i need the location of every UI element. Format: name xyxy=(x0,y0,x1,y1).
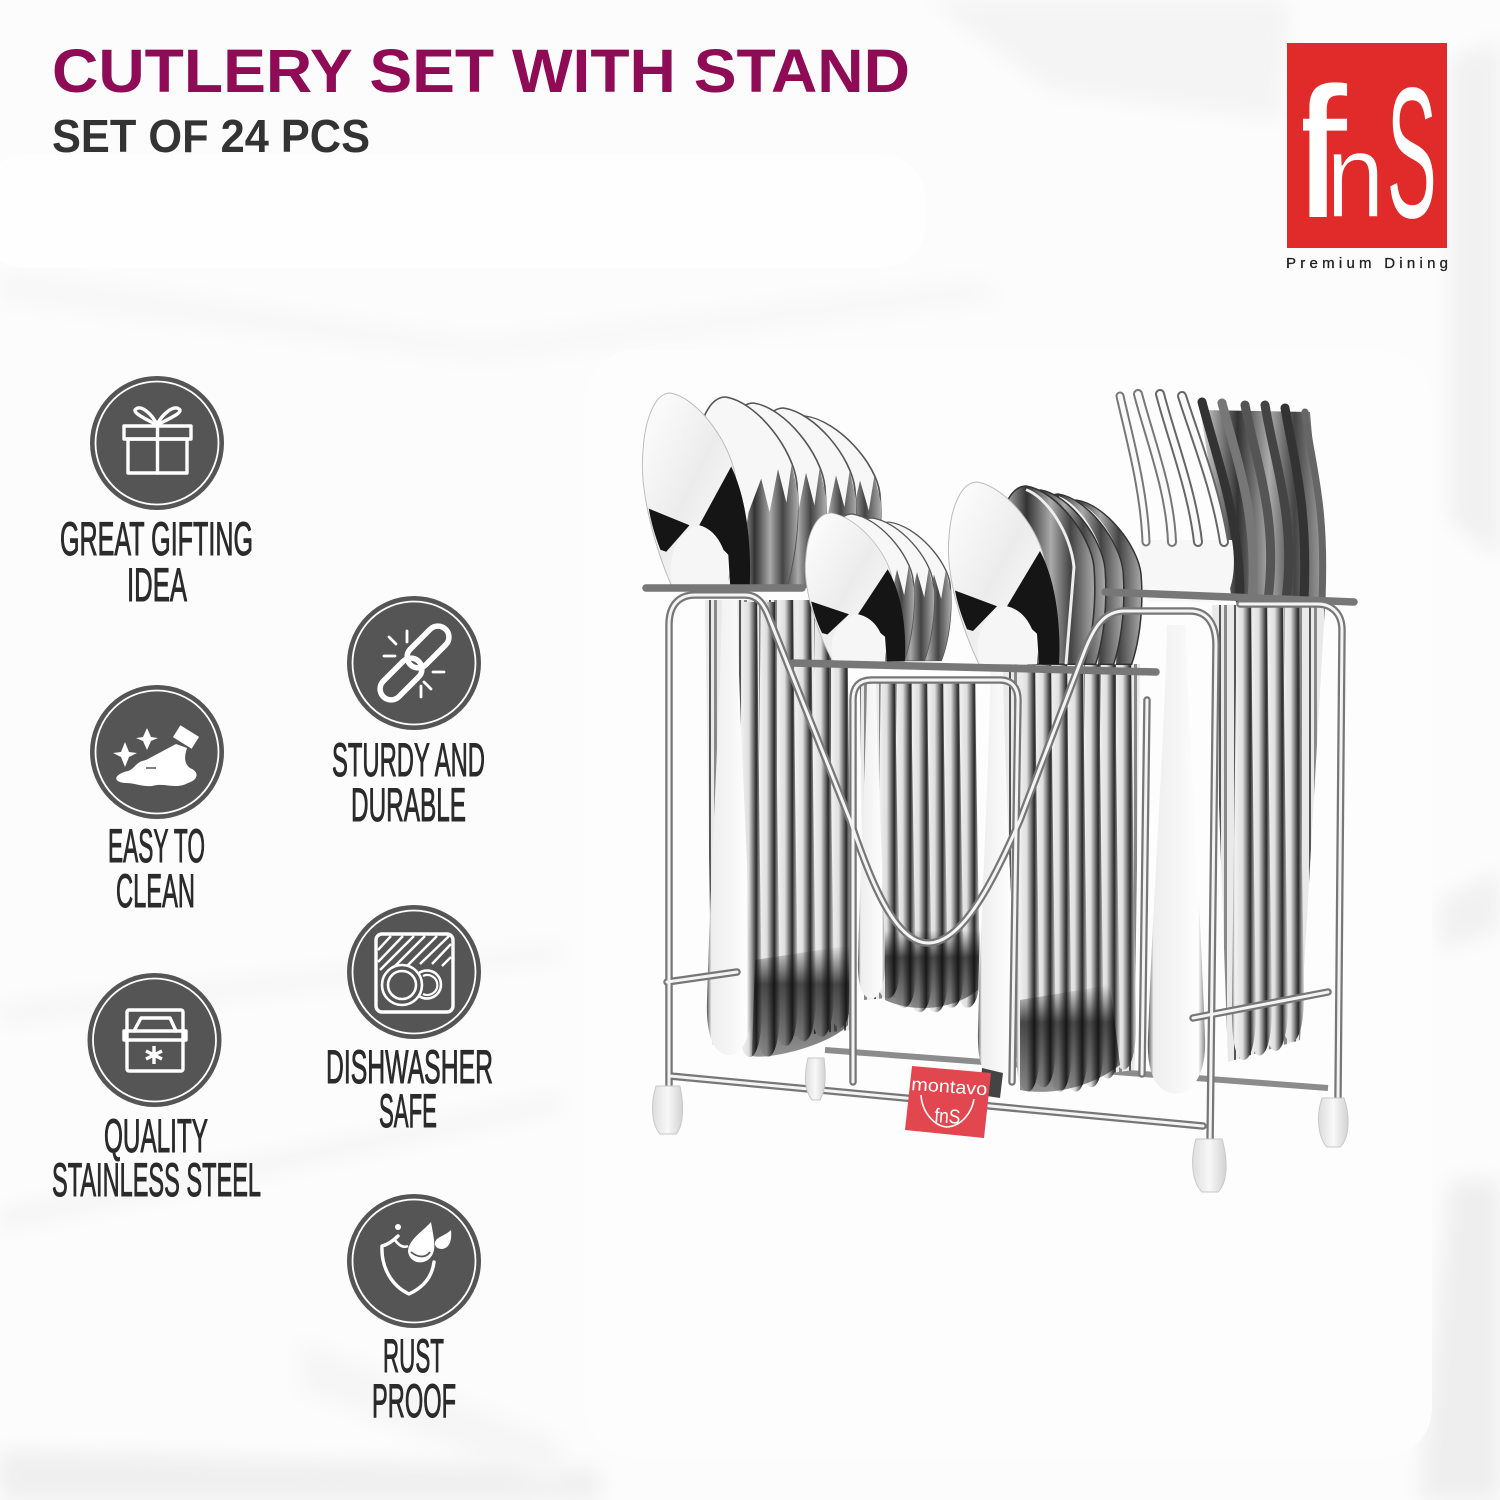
logo wordmark: S xyxy=(1387,50,1437,258)
brand tag: fnS xyxy=(934,1105,961,1129)
large spoon bowls xyxy=(642,393,881,587)
fork handles xyxy=(1148,605,1325,1094)
large spoon handles xyxy=(705,600,852,1057)
product backdrop panel xyxy=(585,350,1432,1458)
label: STAINLESS STEEL xyxy=(52,1153,261,1206)
feature: easy to clean: EASY TO xyxy=(108,819,205,872)
medium spoon bowls xyxy=(948,482,1142,664)
logo xyxy=(1286,43,1448,272)
label: RUST xyxy=(383,1329,444,1382)
brand tag: montavo xyxy=(911,1074,988,1099)
feature: easy to clean xyxy=(90,685,224,917)
small spoon handles xyxy=(858,680,980,1012)
icon: cooler box xyxy=(88,973,222,1107)
stand wire frame xyxy=(646,588,1354,1145)
label: PROOF xyxy=(372,1374,456,1427)
label: SAFE xyxy=(379,1084,437,1137)
logo tagline: Premium Dining xyxy=(1286,255,1448,272)
label xyxy=(372,1329,456,1427)
label xyxy=(326,1040,493,1137)
label xyxy=(52,1109,261,1206)
stand feet xyxy=(653,1058,1348,1192)
label xyxy=(332,733,485,831)
feature: great gifting idea xyxy=(60,376,253,611)
feature: dishwasher safe xyxy=(326,905,493,1137)
logo wordmark xyxy=(1303,82,1434,219)
label: DISHWASHER xyxy=(326,1040,493,1093)
label: DURABLE xyxy=(351,778,466,831)
label: CLEAN xyxy=(116,864,195,917)
logo wordmark: f xyxy=(1292,48,1348,257)
heading backdrop panel xyxy=(0,155,926,268)
logo red square xyxy=(1287,43,1447,248)
product: cutlery set in wire stand xyxy=(642,393,1354,1192)
icon: gift xyxy=(90,376,224,510)
fork heads xyxy=(1120,394,1326,602)
medium spoon handles xyxy=(978,660,1140,1092)
title: CUTLERY SET WITH STAND xyxy=(52,37,910,105)
logo wordmark: n xyxy=(1326,109,1385,242)
label xyxy=(108,819,205,917)
label xyxy=(60,512,253,611)
label: QUALITY xyxy=(104,1109,208,1162)
feature: quality stainless steel xyxy=(52,973,261,1206)
label: STURDY AND xyxy=(332,733,485,786)
feature: rust proof xyxy=(347,1194,481,1427)
icon: chain xyxy=(347,596,481,730)
brand tag xyxy=(905,1066,1003,1138)
icon: spill and sparkle xyxy=(90,685,224,819)
label: GREAT GIFTING xyxy=(60,512,253,565)
icon: shield and drops xyxy=(347,1194,481,1328)
small spoon bowls xyxy=(805,513,951,662)
subtitle: SET OF 24 PCS xyxy=(52,110,370,162)
icon: dishwasher xyxy=(347,905,481,1039)
label: IDEA xyxy=(127,558,187,611)
back base rod xyxy=(825,1050,1328,1088)
feature: sturdy and durable xyxy=(332,596,485,831)
